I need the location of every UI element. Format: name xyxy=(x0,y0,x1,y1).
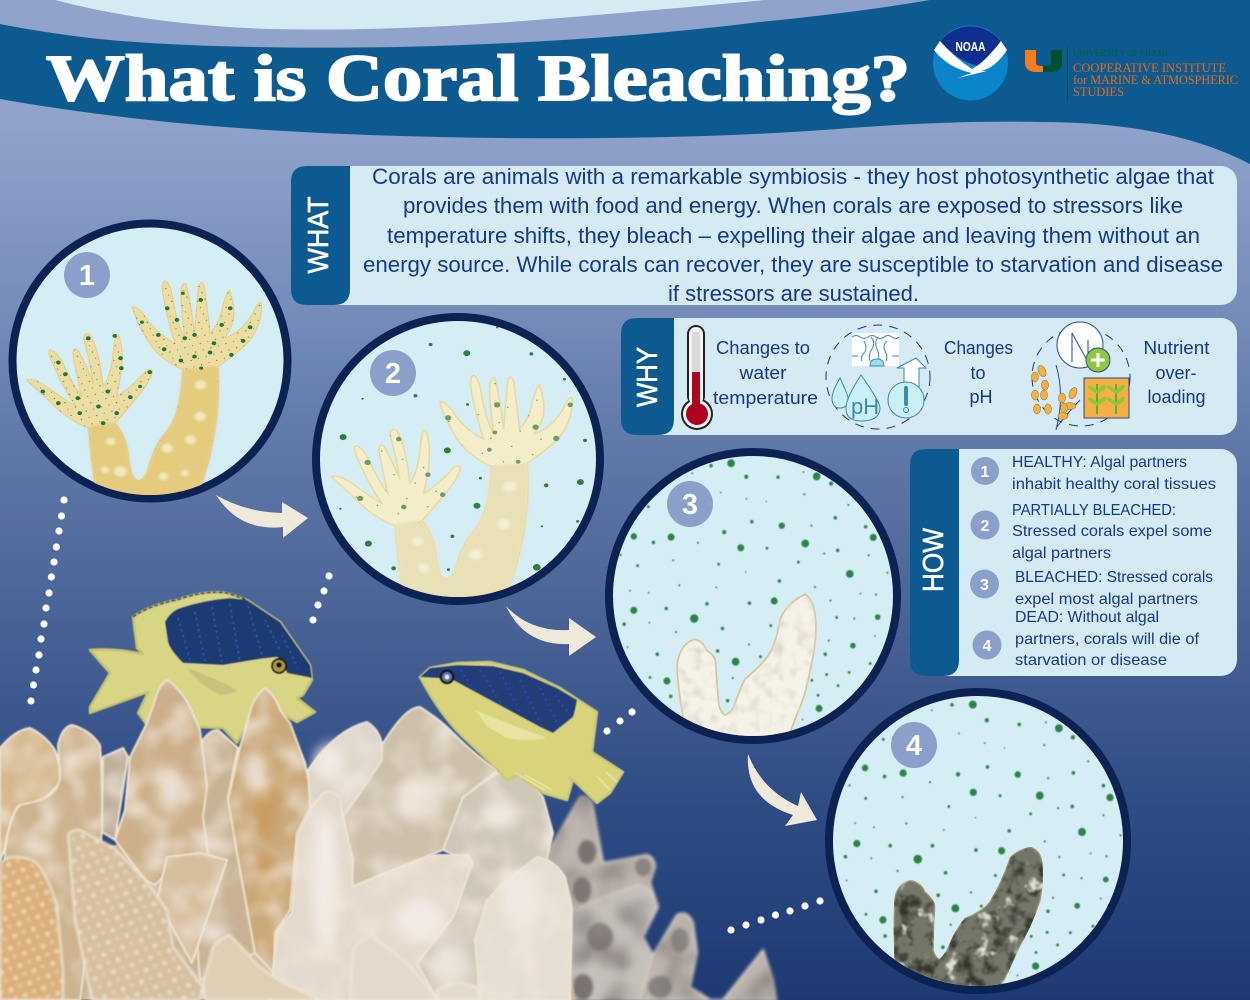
step 3: BLEACHED: Stressed corals xyxy=(1015,569,1213,586)
stage 3: bleached coral xyxy=(609,452,897,740)
label: water temperature: water xyxy=(738,363,787,383)
badge 2: 2 xyxy=(385,358,401,390)
arrow: stage 3 to 4 xyxy=(748,754,817,826)
label: changes to pH: pH xyxy=(969,387,993,407)
step 3: 3 xyxy=(980,577,989,594)
step 1: 1 xyxy=(981,464,990,481)
what description: if stressors are sustained. xyxy=(668,281,919,306)
fish: behind coral xyxy=(90,592,315,743)
badge 4: 4 xyxy=(906,730,922,762)
step 3 xyxy=(970,569,1213,608)
what description: energy source. While corals can recover, they are susceptible to starvation and disease xyxy=(363,252,1223,277)
step 2: PARTIALLY BLEACHED: xyxy=(1012,502,1176,519)
label: changes to pH xyxy=(944,338,1013,407)
logo: University of Miami CIMAS: UNIVERSITY OF MIAMI xyxy=(1073,48,1168,58)
what description: temperature shifts, they bleach – expelling their algae and leaving them without an xyxy=(387,223,1200,248)
pH symbol: pH xyxy=(851,394,879,419)
stage 1: healthy coral xyxy=(12,224,288,500)
step 2: algal partners xyxy=(1012,545,1111,562)
header wave band xyxy=(0,0,1250,164)
fish: in front of coral xyxy=(420,662,623,803)
coral dead and free algae xyxy=(842,700,1122,986)
logo: University of Miami CIMAS: COOPERATIVE INSTITUTE xyxy=(1073,61,1226,75)
logo: University of Miami CIMAS: STUDIES xyxy=(1073,85,1124,99)
logo: University of Miami CIMAS: for MARINE & ATMOSPHERIC xyxy=(1073,73,1238,87)
dotted line: stage 3 to reef xyxy=(603,708,636,735)
what description xyxy=(363,164,1223,306)
how label: HOW xyxy=(918,527,950,592)
step 4 xyxy=(972,609,1200,669)
icon: nutrients xyxy=(1032,322,1130,430)
stage 4: dead coral xyxy=(829,687,1134,990)
label: nutrient overloading: Nutrient xyxy=(1144,338,1210,358)
arrow: stage 1 to 2 xyxy=(216,495,308,538)
label: nutrient overloading: over- xyxy=(1155,363,1197,383)
label: water temperature: Changes to xyxy=(716,338,810,358)
badge 1: 1 xyxy=(79,260,95,292)
step 1: inhabit healthy coral tissues xyxy=(1012,476,1216,493)
label: water temperature xyxy=(713,338,818,408)
badge 4 xyxy=(891,722,937,768)
dotted line: stage 4 to reef xyxy=(727,897,824,934)
step 2: 2 xyxy=(981,518,990,535)
badge 2 xyxy=(370,350,416,396)
back corals xyxy=(0,680,575,1000)
title: What is Coral Bleaching? xyxy=(46,42,910,115)
dead coral grey section xyxy=(540,797,776,1000)
panel: why xyxy=(621,318,1237,435)
step 4: 4 xyxy=(983,638,992,655)
icon: pH changes xyxy=(826,325,930,429)
step 2 xyxy=(970,502,1212,562)
label: changes to pH: Changes xyxy=(944,338,1013,358)
badge 3 xyxy=(667,481,713,527)
what description: Corals are animals with a remarkable symbiosis - they host photosynthetic algae that xyxy=(372,164,1214,189)
logo: NOAA: NOAA xyxy=(956,39,986,54)
step 4: starvation or disease xyxy=(1015,652,1167,669)
label: nutrient overloading: loading xyxy=(1148,387,1206,407)
label: changes to pH: to xyxy=(970,363,986,383)
logo: University of Miami CIMAS xyxy=(1025,45,1238,101)
step 2: Stressed corals expel some xyxy=(1012,523,1212,540)
polyps partially bleached xyxy=(331,327,587,599)
dotted line: stage 2 to reef xyxy=(309,572,333,624)
dotted line: stage 1 to reef xyxy=(27,496,68,705)
why label: WHY xyxy=(632,347,664,407)
coral reef xyxy=(0,680,776,1000)
mid corals xyxy=(157,792,572,1000)
coral bleached and free algae xyxy=(620,459,888,738)
step 3: expel most algal partners xyxy=(1015,591,1198,608)
logo: NOAA xyxy=(933,26,1008,100)
stage 2: partially bleached coral xyxy=(316,317,600,601)
badge 1 xyxy=(64,252,110,298)
step 1 xyxy=(971,454,1216,493)
what label: WHAT xyxy=(303,196,335,274)
label: water temperature: temperature xyxy=(713,388,818,408)
label: nutrient overloading xyxy=(1144,338,1210,407)
arrow: stage 2 to 3 xyxy=(506,606,596,656)
step 1: HEALTHY: Algal partners xyxy=(1012,454,1187,471)
step 4: DEAD: Without algal xyxy=(1015,609,1159,626)
icon: thermometer xyxy=(681,325,713,430)
polyps healthy xyxy=(26,281,262,500)
what description: provides them with food and energy. When corals are exposed to stressors like xyxy=(403,193,1183,218)
foreground corals xyxy=(0,830,480,1000)
step 4: partners, corals will die of xyxy=(1015,631,1200,648)
badge 3: 3 xyxy=(682,489,698,521)
panel: what xyxy=(291,164,1237,306)
panel: how xyxy=(910,449,1237,676)
